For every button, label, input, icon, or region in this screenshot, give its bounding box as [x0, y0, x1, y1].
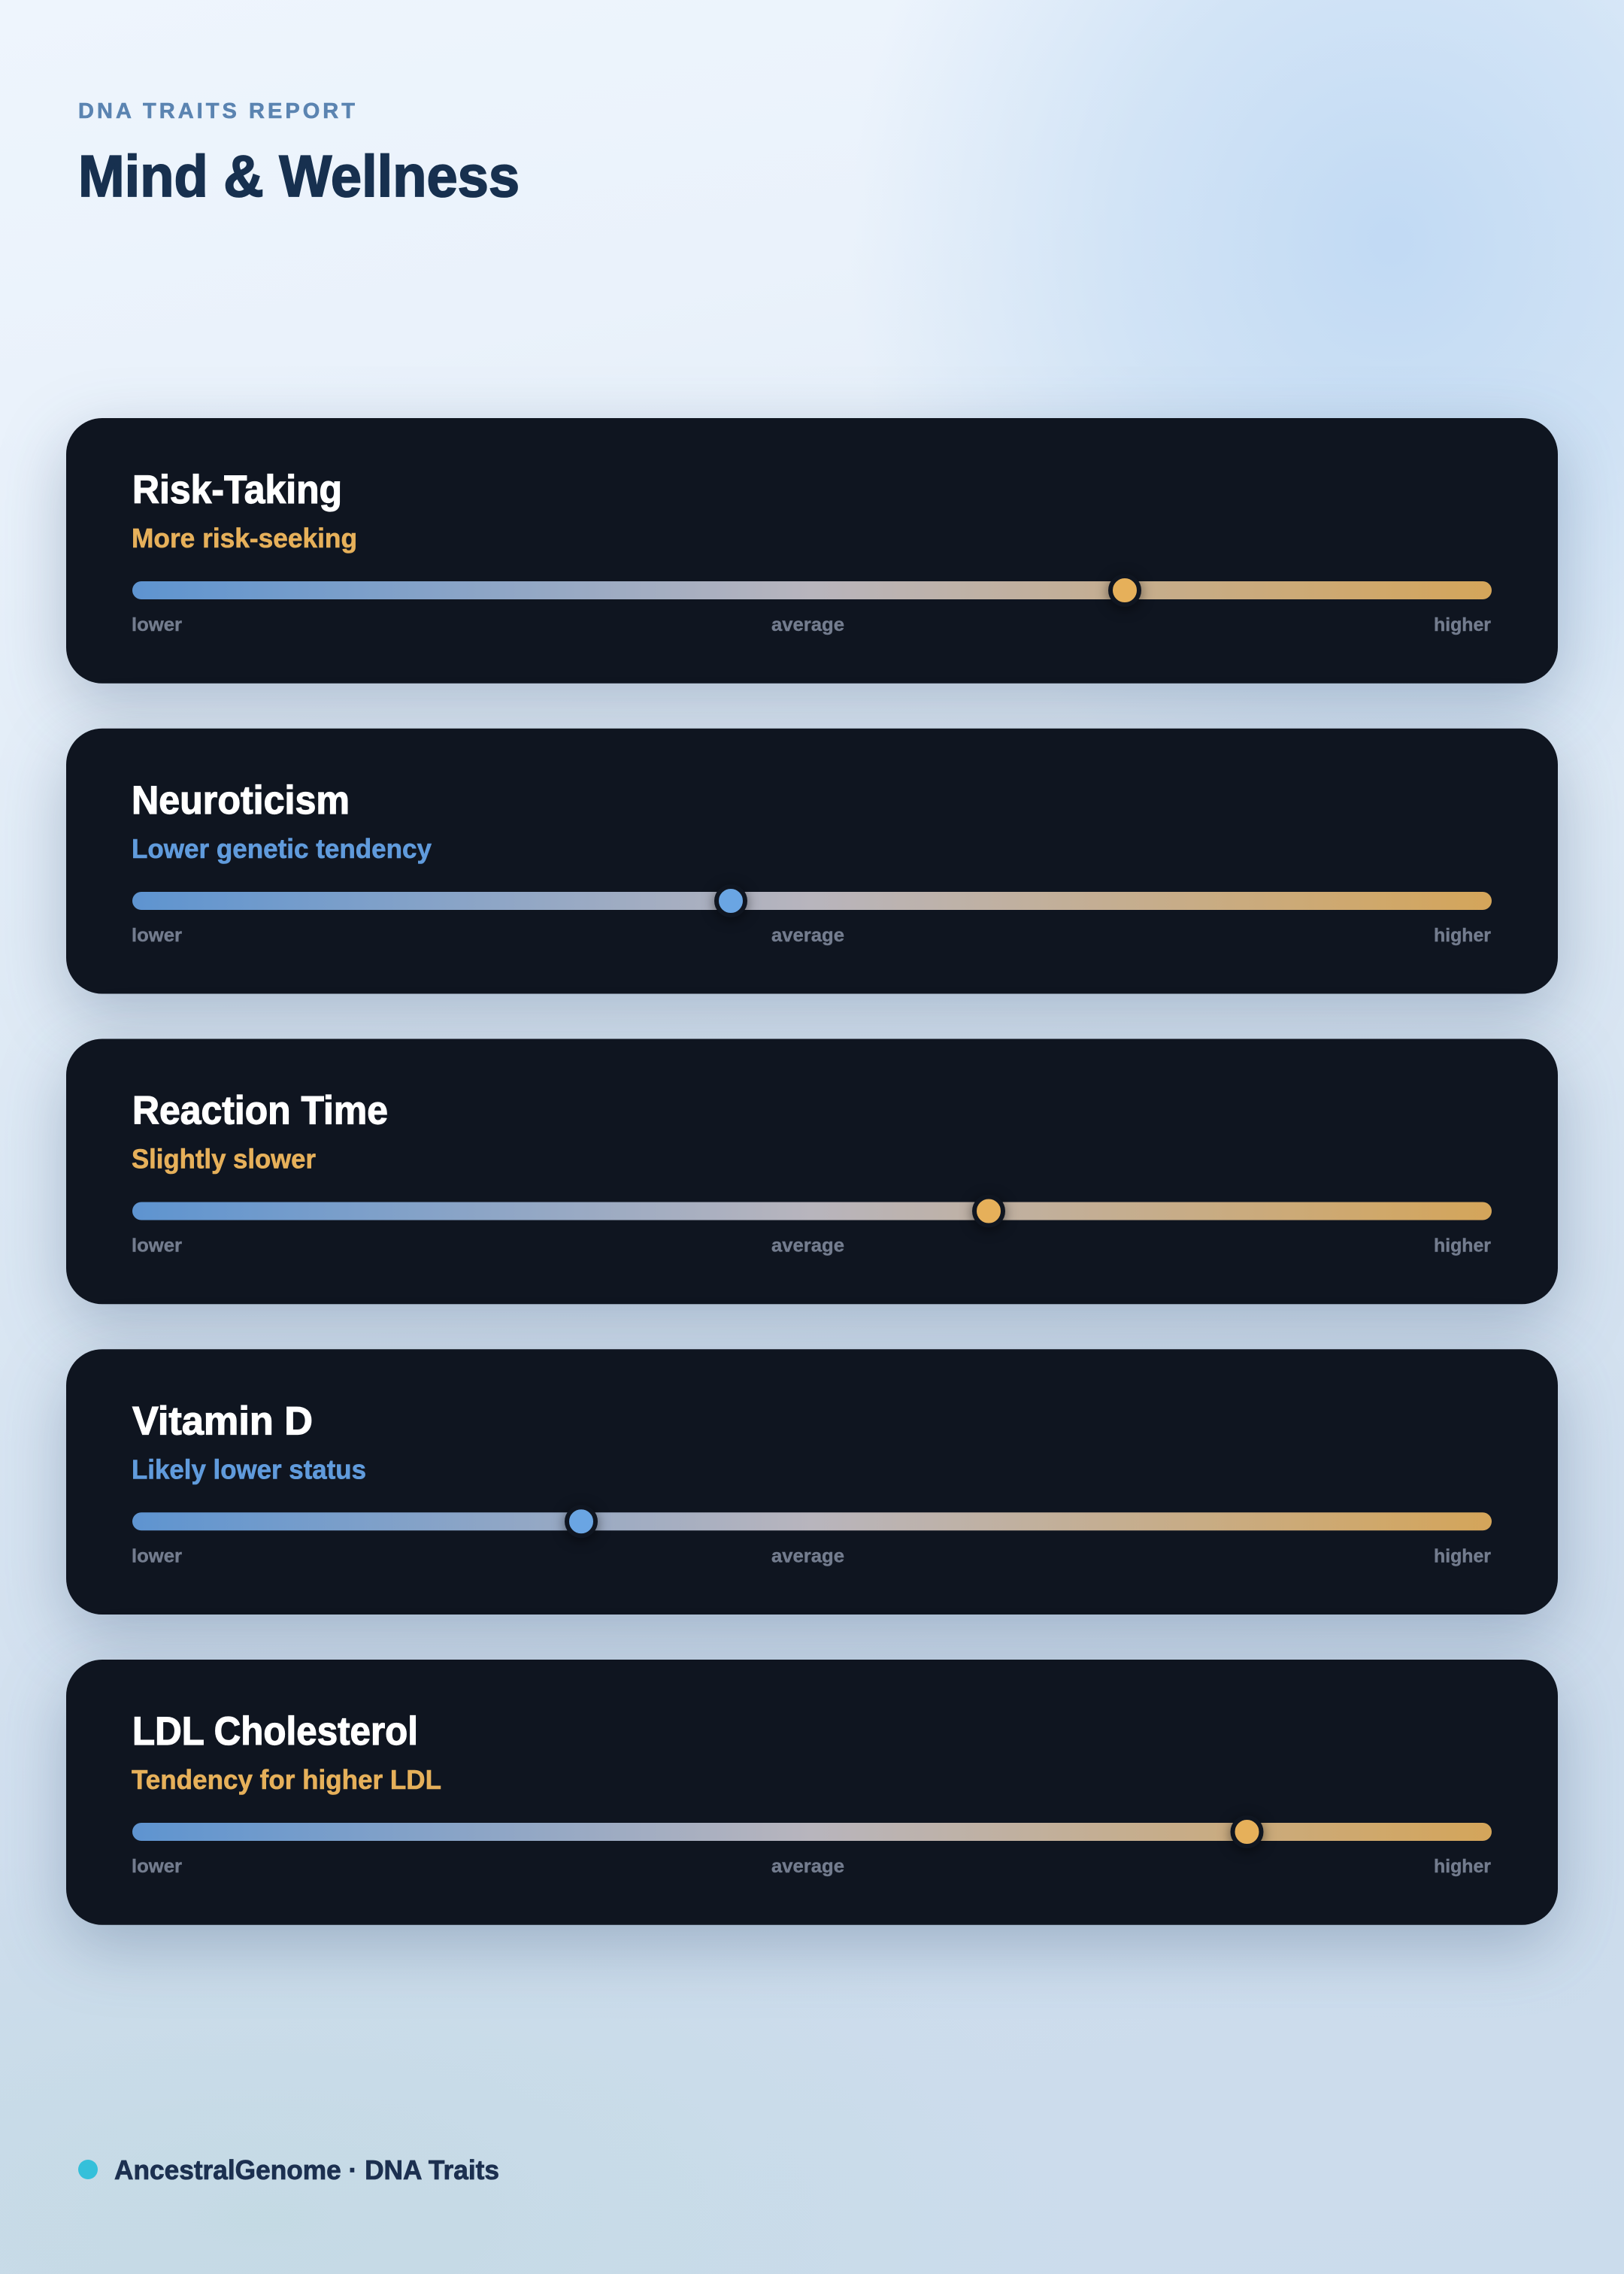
panel: Risk-Taking [66, 418, 1558, 684]
slider knob [1110, 576, 1139, 605]
scale labels: higher [1434, 1856, 1491, 1877]
trait name: LDL Cholesterol [132, 1709, 418, 1754]
slider knob [567, 1507, 595, 1536]
panel: LDL Cholesterol [66, 1660, 1558, 1925]
footer brand text: AncestralGenome · DNA Traits [114, 2154, 499, 2185]
scale labels: lower [132, 925, 182, 946]
scale labels: higher [1434, 925, 1491, 946]
scale labels: lower [132, 614, 182, 635]
slider track [132, 892, 1492, 910]
trait name: Reaction Time [132, 1089, 388, 1132]
footer [78, 2154, 499, 2185]
slider track [132, 581, 1492, 599]
scale labels: lower [132, 1856, 182, 1877]
scale labels: average [771, 925, 844, 946]
scale labels [132, 925, 1491, 946]
trait result: Likely lower status [132, 1454, 366, 1484]
scale labels: average [771, 1856, 844, 1877]
slider knob [717, 887, 745, 915]
panel: Neuroticism [66, 729, 1558, 994]
trait result: Slightly slower [132, 1143, 316, 1175]
scale labels: average [771, 1235, 844, 1256]
scale labels: lower [132, 1545, 182, 1566]
scale labels: lower [132, 1235, 182, 1256]
scale labels [132, 1856, 1491, 1877]
slider track [132, 1512, 1492, 1530]
eyebrow: DNA Traits Report: DNA TRAITS REPORT [78, 99, 355, 123]
trait result: Tendency for higher LDL [132, 1764, 441, 1795]
trait name: Risk-Taking [132, 468, 342, 512]
slider knob [1233, 1818, 1262, 1846]
panel: Reaction Time [66, 1039, 1558, 1304]
trait name: Vitamin D [132, 1399, 313, 1443]
trait name: Neuroticism [132, 778, 350, 823]
scale labels: higher [1434, 614, 1491, 635]
slider track [132, 1823, 1492, 1841]
scale labels: higher [1434, 1235, 1491, 1256]
scale labels [132, 1545, 1491, 1566]
scale labels: average [771, 614, 844, 635]
panel: Vitamin D [66, 1349, 1558, 1615]
icon: teal dot [78, 2160, 98, 2179]
slider knob [974, 1197, 1003, 1226]
trait result: More risk-seeking [132, 523, 357, 553]
scale labels: average [771, 1545, 844, 1566]
trait result: Lower genetic tendency [132, 833, 432, 864]
title: Mind & Wellness [78, 143, 520, 209]
scale labels [132, 614, 1491, 635]
scale labels [132, 1235, 1491, 1256]
scale labels: higher [1434, 1545, 1491, 1566]
slider track [132, 1202, 1492, 1220]
